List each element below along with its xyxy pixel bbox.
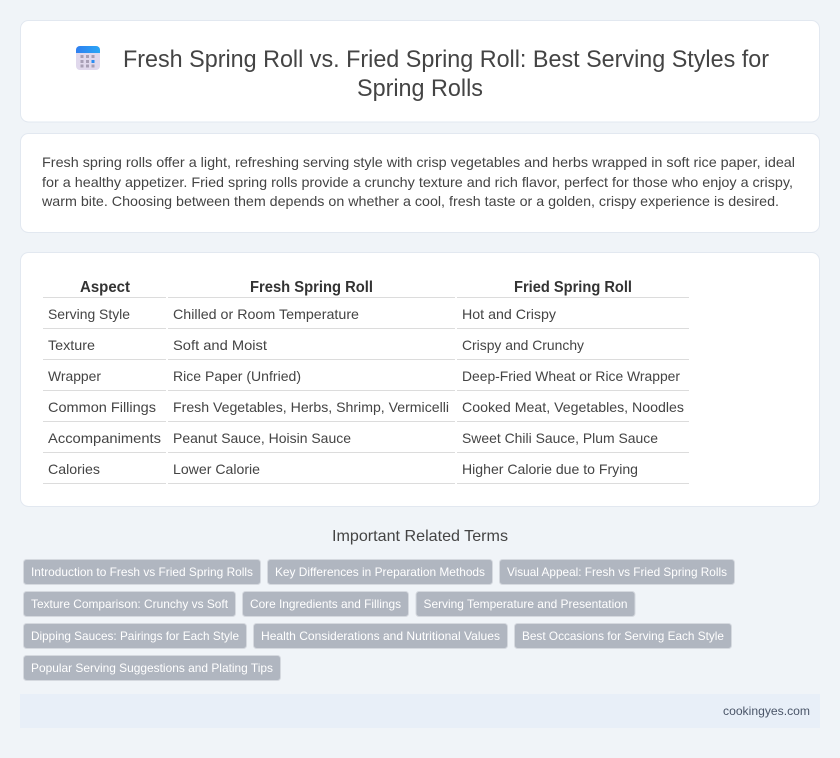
intro paragraph: Fresh spring rolls offer a light, refreshing serving style with crisp vegetables and herbs wrapped in soft rice paper, ideal [42,154,795,170]
tag: Popular Serving Suggestions and Plating Tips [31,661,273,675]
row: serving style: Hot and Crispy [462,306,556,322]
row: texture: Soft and Moist [173,337,267,353]
row: common fillings: Common Fillings [48,399,156,415]
related term tags [24,560,734,680]
row: texture: Texture [48,337,95,353]
tag [416,592,635,616]
row: serving style [48,306,556,322]
row: accompaniments: Peanut Sauce, Hoisin Sauce [173,430,351,446]
row: calories [48,461,638,477]
tag: Texture Comparison: Crunchy vs Soft [31,597,229,611]
row: texture: Crispy and Crunchy [462,337,584,353]
footer [20,694,820,728]
row: accompaniments: Accompaniments [48,430,161,446]
footer source text: cookingyes.com [723,704,810,718]
tag: Health Considerations and Nutritional Values [261,629,500,643]
heading: related terms: Important Related Terms [332,528,508,545]
row: common fillings: Fresh Vegetables, Herbs, Shrimp, Vermicelli [173,399,449,415]
row: wrapper: Deep-Fried Wheat or Rice Wrapper [462,368,680,384]
tag [242,592,408,616]
title: Fresh Spring Roll vs. Fried Spring Roll: Best Serving Styles for [123,46,769,73]
row: common fillings: Cooked Meat, Vegetables, Noodles [462,399,684,415]
tag [24,656,280,680]
tag [254,624,508,648]
row: serving style: Serving Style [48,306,130,322]
intro paragraph: for a healthy appetizer. Fried spring rolls provide a crunchy texture and rich flavor, perfect for those who enjoy a crispy, [42,174,793,190]
row: calories: Calories [48,461,100,477]
table header row: Fried Spring Roll [514,279,632,296]
icon: calendar [76,46,100,70]
row: calories: Higher Calorie due to Frying [462,461,638,477]
row: wrapper [48,368,680,384]
row: common fillings [48,399,684,415]
tag: Visual Appeal: Fresh vs Fried Spring Rolls [507,565,727,579]
panel: introduction [20,134,820,232]
tag: Core Ingredients and Fillings [250,597,401,611]
row: texture [48,337,584,353]
table header row: Aspect [80,279,131,296]
tag [268,560,492,584]
tag: Serving Temperature and Presentation [424,597,628,611]
row: wrapper: Wrapper [48,368,101,384]
tag [24,624,246,648]
row: wrapper: Rice Paper (Unfried) [173,368,301,384]
table header row [80,279,632,296]
tag: Key Differences in Preparation Methods [275,565,485,579]
tag [514,624,732,648]
row: calories: Lower Calorie [173,461,260,477]
table header row: Fresh Spring Roll [250,279,373,296]
tag [500,560,734,584]
row: accompaniments [48,430,658,446]
panel: comparison table [20,252,820,506]
tag [24,592,236,616]
tag: Dipping Sauces: Pairings for Each Style [31,629,239,643]
row: serving style: Chilled or Room Temperature [173,306,359,322]
tag [24,560,260,584]
panel: header [20,20,820,122]
row: accompaniments: Sweet Chili Sauce, Plum Sauce [462,430,658,446]
tag: Introduction to Fresh vs Fried Spring Rolls [31,565,253,579]
intro paragraph: warm bite. Choosing between them depends on whether a cool, fresh taste or a golden, crispy experience is desired. [41,193,779,209]
title: Spring Rolls [357,75,483,102]
tag: Best Occasions for Serving Each Style [522,629,724,643]
